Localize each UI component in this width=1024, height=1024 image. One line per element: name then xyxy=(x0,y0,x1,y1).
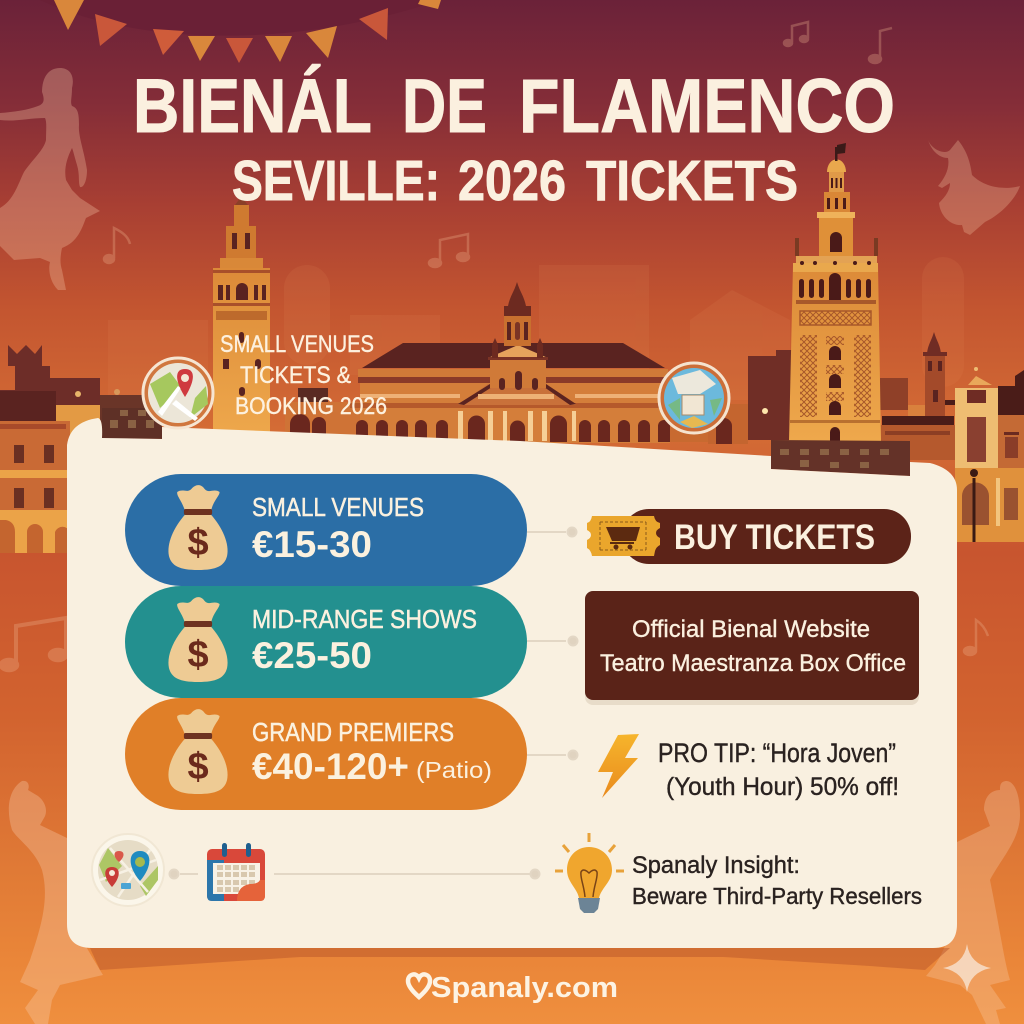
label: small venues: €15-30 xyxy=(252,524,372,565)
label: mid-range xyxy=(252,604,477,676)
insight text: Spanaly Insight: xyxy=(632,852,800,879)
icon: city map xyxy=(92,834,164,906)
panel shadow xyxy=(90,948,950,970)
buy tickets button xyxy=(622,509,911,564)
pro tip: (Youth Hour) 50% off! xyxy=(666,773,899,801)
label: grand premiers: GRAND PREMIERS xyxy=(252,717,454,747)
silhouette: dancer bottom right xyxy=(926,781,1020,1024)
icon: light bulb xyxy=(555,833,624,913)
label: mid-range: €25-50 xyxy=(252,635,372,676)
label: grand premiers: (Patio) xyxy=(416,757,492,783)
label: mid-range: MID-RANGE SHOWS xyxy=(252,604,477,634)
subtitle over tower: BOOKING 2026 xyxy=(235,393,387,420)
pill: small venues xyxy=(125,474,527,586)
sparkle xyxy=(943,944,991,992)
connectors xyxy=(170,528,578,878)
right buildings xyxy=(748,332,1024,542)
pro tip xyxy=(658,738,899,801)
subtitle over tower: TICKETS & xyxy=(240,362,351,389)
left bell tower xyxy=(213,197,270,438)
insight text xyxy=(632,852,922,909)
icon: calendar xyxy=(207,843,265,901)
pill: mid-range shows xyxy=(125,586,527,698)
insight text: Beware Third-Party Resellers xyxy=(632,883,922,909)
title: TICKETS xyxy=(586,149,798,213)
footer logo: Spanaly.com xyxy=(431,972,618,1004)
main panel xyxy=(67,418,957,948)
skyline: left buildings xyxy=(0,345,162,553)
icon: money bag xyxy=(168,485,228,570)
title: DE xyxy=(402,64,487,149)
pill: grand premiers xyxy=(125,698,527,810)
title: FLAMENCO xyxy=(519,64,895,149)
bunting xyxy=(40,0,441,63)
silhouette: dancer top left xyxy=(0,68,100,290)
label: small venues xyxy=(252,492,424,565)
music notes xyxy=(0,22,988,671)
icon: money bag xyxy=(168,597,228,682)
title: SEVILLE: xyxy=(232,149,440,213)
subtitle over tower: SMALL VENUES xyxy=(220,331,374,358)
subtitle over tower xyxy=(220,331,387,420)
icon: lightning bolt xyxy=(598,734,639,798)
icon: money bag xyxy=(168,709,228,794)
label: grand premiers: €40-120+ xyxy=(252,746,409,787)
silhouette: dancer bottom left xyxy=(9,781,103,1024)
pro tip: PRO TIP: “Hora Joven” xyxy=(658,738,896,768)
title: 2026 xyxy=(458,149,566,213)
silhouette: dancer top right xyxy=(928,140,1020,235)
faint skyline xyxy=(108,257,964,410)
Giralda tower xyxy=(789,143,881,441)
box: where to buy: Teatro Maestranza Box Office xyxy=(600,650,906,677)
stone plinths xyxy=(102,408,910,476)
title: BIENÁL xyxy=(133,64,372,149)
icon: map pin badge xyxy=(143,358,213,428)
label: grand premiers xyxy=(252,717,492,787)
title xyxy=(133,64,895,213)
icon: ticket cart xyxy=(587,516,660,556)
icon: venue map badge xyxy=(659,363,729,433)
box: where to buy xyxy=(585,591,919,705)
buy tickets button: BUY TICKETS xyxy=(674,518,875,557)
box: where to buy: Official Bienal Website xyxy=(632,616,870,643)
centre palace xyxy=(285,282,748,444)
label: small venues: SMALL VENUES xyxy=(252,492,424,522)
